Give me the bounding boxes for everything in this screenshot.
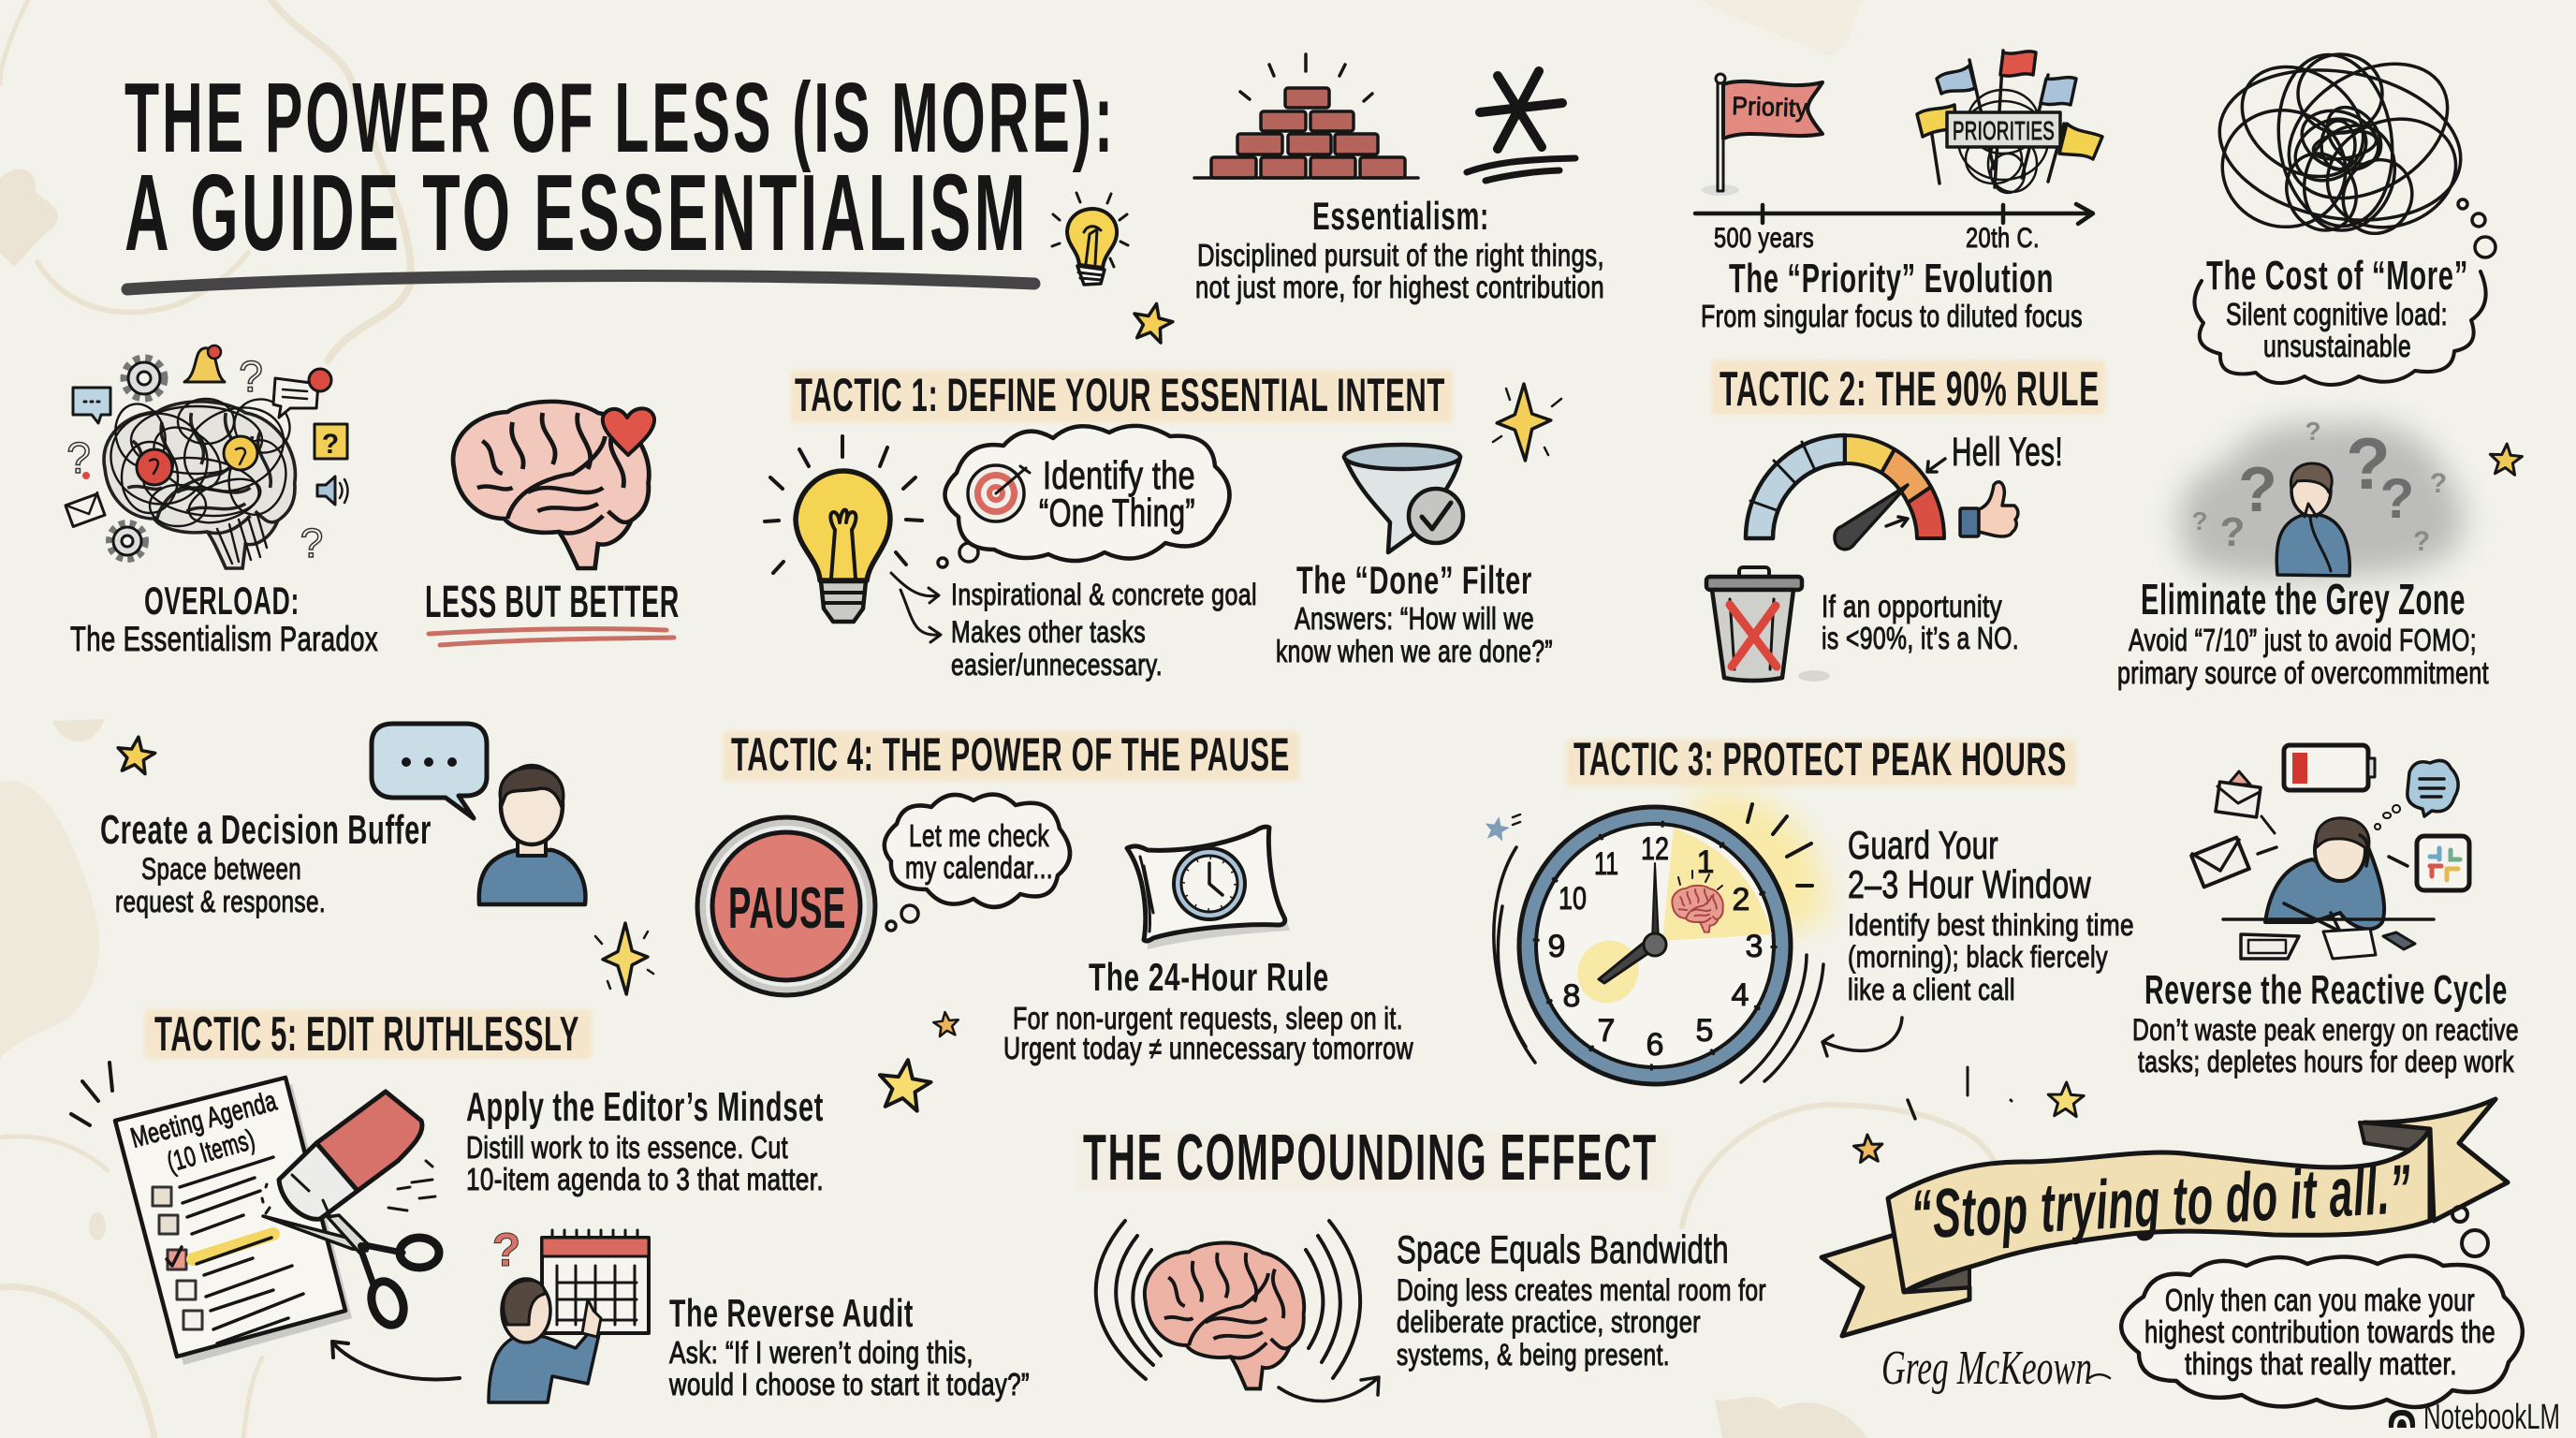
heading: Apply the Editor’s Mindset [466,1084,824,1130]
panel: tactic 1 [765,369,1561,682]
icon: many priority flags with scribble: PRIORITIES [1953,116,2055,145]
label: Hell Yes: Hell Yes! [1952,430,2063,475]
thought bubbles [2452,1207,2488,1256]
panel: compounding effect [1076,1121,1766,1401]
rule line 1: If an opportunity [1822,589,2002,624]
cloud [944,426,1230,561]
icons: distractions around brain: ? [300,521,323,566]
icon: pause button [697,817,875,995]
body line 2: not just more, for highest contribution [1195,270,1604,304]
rule line 2: is <90%, it’s a NO. [1822,621,2019,655]
icon: star [115,734,157,775]
heading: TACTIC 3: PROTECT PEAK HOURS [1573,733,2067,785]
icon: thinking person [2276,463,2349,576]
panel: tactic 3 [1483,733,2134,1084]
title line 2: A GUIDE TO ESSENTIALISM [124,152,1029,273]
filter body line 1: Answers: “How will we [1295,601,1534,636]
question marks: ? [2191,506,2208,536]
icon: thought bubble with lines [2375,760,2458,829]
bullet 2 line 1: Makes other tasks [951,615,1146,649]
thought bubbles [938,543,978,567]
icons: distractions around brain: ? [322,429,339,460]
coffee stains [0,0,1994,1438]
panel: tactic 5 [71,1007,1030,1402]
question marks: ? [2346,422,2391,505]
heading: OVERLOAD: [144,579,300,623]
heading: Create a Decision Buffer [100,807,432,853]
icon: pillow with clock [1127,827,1290,949]
panel: decision buffer [100,724,585,918]
ribbon folds [2360,1123,2430,1152]
grey cloud [2179,422,2463,579]
ribbon right tail [2364,1099,2508,1221]
heading highlight [1566,740,2076,786]
label: 500 years: 500 years [1714,223,1814,254]
body line 1: Ask: “If I weren’t doing this, [669,1335,973,1370]
icon: envelope top [2216,771,2275,833]
icon: healthy brain [453,402,649,568]
rule heading: The 24-Hour Rule [1089,955,1329,999]
icon: brush strokes [1467,158,1575,181]
icon: large light bulb [765,436,922,622]
body line 2: 10-item agenda to 3 that matter. [466,1162,824,1196]
icon: many priority flags with scribble [1917,51,2102,193]
curved arrows [891,573,941,642]
icon: clock: 2 [1733,882,1749,917]
icon: clock: 9 [1548,929,1565,964]
body line 2: (morning); black fiercely [1848,940,2108,974]
cloud text line 2: my calendar... [905,850,1053,885]
icon: thumbs up [1960,482,2018,536]
icon: envelope left [2191,838,2276,887]
icon: funnel with check [1344,445,1463,552]
body line 2: would I choose to start it today?” [668,1367,1030,1401]
icon: single priority flag: Priority [1732,92,1808,123]
heading: LESS BUT BETTER [425,578,680,627]
panel: less but better [425,402,680,645]
heading highlight [1711,360,2105,415]
icon: clock: 7 [1598,1013,1615,1049]
faint heading highlight [1076,1131,1668,1193]
filter heading: The “Done” Filter [1296,558,1532,602]
question marks: ? [2220,509,2245,555]
question marks: ? [2238,454,2277,525]
thought bubbles [2458,199,2496,257]
icon: person with calendar [489,1224,649,1402]
arrow to gauge [1927,459,1945,472]
question marks: ? [2380,467,2414,530]
panel: tactic 4 [697,728,1413,1065]
red underlines [429,629,674,645]
heading line 2: 2–3 Hour Window [1848,862,2091,906]
icon: trash can with red X [1706,567,1830,682]
body line 2: request & response. [115,885,326,918]
heading highlight [791,370,1453,423]
icon: blue star marks [1483,814,1520,842]
ribbon left tail [1822,1235,1969,1336]
icon: clock: 8 [1563,978,1580,1014]
icon: target [968,465,1030,521]
icon: pause button: PAUSE [728,876,846,941]
panel: quote banner [1822,1099,2523,1408]
icon: scissors [263,1215,439,1329]
rule body line 1: For non-urgent requests, sleep on it. [1013,1001,1403,1035]
icon: person [479,766,585,904]
heading: The “Priority” Evolution [1729,256,2054,301]
icon: brick pyramid [1194,54,1418,178]
body: From singular focus to diluted focus [1701,299,2083,333]
panel: tactic 2 [1706,360,2105,682]
body line 3: like a client call [1848,973,2015,1006]
panel: priority evolution [1695,51,2102,333]
body line 2: deliberate practice, stronger [1397,1305,1701,1339]
icon: tangled scribble [2207,37,2473,245]
cloud text line 1: Let me check [909,818,1049,853]
icon: agenda sheet: (10 Items) [164,1124,258,1179]
icon: speech bubble [372,724,487,818]
body line 1: Disciplined pursuit of the right things, [1197,238,1604,272]
question marks: ? [2305,417,2321,446]
filter body line 2: know when we are done?” [1276,634,1553,668]
icon: clock: 3 [1746,929,1763,964]
icon: clock: 12 [1641,831,1669,867]
question marks: ? [2430,468,2447,499]
icon: agenda sheet [71,1063,352,1365]
cloud [885,795,1070,907]
title line 1: THE POWER OF LESS (IS MORE): [124,63,1116,173]
subheading: The Essentialism Paradox [70,620,378,658]
cloud line 3: things that really matter. [2185,1346,2457,1381]
title underline [127,276,1034,289]
star [1130,300,1176,345]
heading: Essentialism: [1312,194,1489,238]
cloud [2121,1255,2523,1408]
body line 1: Distill work to its essence. Cut [466,1130,788,1165]
panel: reactive cycle [2132,745,2519,1078]
icons: distractions around brain: ? [66,433,91,482]
icon: clock [1494,792,1826,1084]
icon: asterisk [1480,71,1562,149]
icon: tangled brain [98,389,300,568]
icon: single priority flag [1702,74,1822,196]
thought cloud outline [2194,271,2486,385]
heading: TACTIC 5: EDIT RUTHLESSLY [154,1007,579,1062]
icon: clock: 10 [1559,881,1587,917]
heading line 1: Guard Your [1848,823,1998,867]
icon: brain with waves [1096,1221,1360,1388]
icon: small star [932,1011,959,1037]
icon: sparkle [1493,384,1561,461]
body line 1: Space between [141,852,301,886]
panel: grey zone [2117,417,2523,690]
cloud text line 2: “One Thing” [1039,491,1195,535]
body line 2: unsustainable [2263,329,2411,363]
arrow [332,1342,460,1379]
heading highlight [144,1009,592,1059]
heading: The Reverse Audit [669,1291,914,1335]
icon: clock: 5 [1696,1013,1713,1049]
icon: sparkle [595,923,653,994]
icon: stressed person at desk [2223,818,2434,959]
panel: overload [66,345,378,658]
label: 20th C.: 20th C. [1966,223,2040,254]
question marks [2191,417,2447,557]
icon: low battery [2284,745,2375,790]
icon: star [2489,443,2523,476]
icon: star [875,1056,933,1112]
icons: distractions around brain: ? [239,352,263,401]
ribbon main band [1888,1129,2430,1292]
icon: chat app tile [2389,836,2469,890]
body line 1: Identify best thinking time [1848,908,2134,942]
rule body line 2: Urgent today ≠ unnecessary tomorrow [1003,1031,1413,1065]
cloud line 1: Only then can you make your [2165,1283,2475,1317]
signature: Greg McKeown [1881,1342,2092,1395]
cloud text line 1: Identify the [1043,453,1195,497]
heading: TACTIC 1: DEFINE YOUR ESSENTIAL INTENT [795,369,1445,421]
subheading: Space Equals Bandwidth [1397,1227,1729,1271]
icon: agenda sheet: Meeting Agenda [127,1085,280,1154]
bullet 1: Inspirational & concrete goal [951,578,1257,611]
icon: clock: 1 [1697,844,1714,880]
thought bubbles [886,905,918,931]
icon: gauge [1746,435,1944,550]
icon: clock: 11 [1594,846,1618,882]
icon: eraser [262,1092,435,1219]
icon: small light bulb [1052,193,1128,285]
heading highlight [723,731,1299,781]
icons: distractions around brain [66,345,348,566]
heading: TACTIC 2: THE 90% RULE [1720,362,2100,417]
timeline arrow [1695,204,2093,224]
curved arrow [1822,1018,1902,1056]
heading: THE COMPOUNDING EFFECT [1083,1121,1658,1194]
icon: person with calendar: ? [492,1224,520,1276]
bullet 2 line 2: easier/unnecessary. [951,648,1163,682]
panel: the cost of more [2194,37,2496,385]
question marks: ? [2413,526,2430,557]
icon: clock: 4 [1732,977,1749,1013]
body line 1: Silent cognitive load: [2226,297,2448,331]
icon: clock: 6 [1647,1027,1663,1063]
heading: TACTIC 4: THE POWER OF THE PAUSE [731,728,1290,781]
icon: heart [603,408,654,455]
title [124,63,1116,289]
arrow [1279,1377,1379,1401]
body line 1: Doing less creates mental room for [1397,1273,1766,1307]
decorative marks and stars [1853,1067,2085,1163]
body line 3: systems, & being present. [1397,1338,1670,1372]
panel: essentialism definition [1194,54,1604,304]
